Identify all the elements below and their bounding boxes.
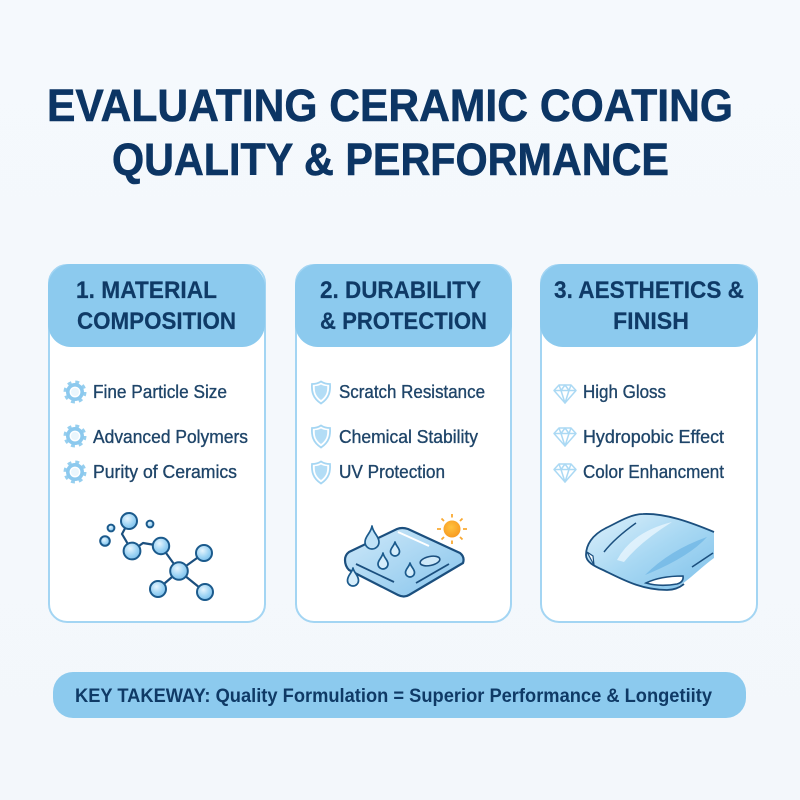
- item: scratch resistance: Scratch Resistance: [339, 381, 485, 402]
- title: [47, 80, 733, 185]
- panel heading: material composition: 1. MATERIAL: [76, 277, 217, 304]
- panel: material composition: [48, 264, 265, 622]
- panel heading: aesthetics and finish: FINISH: [613, 308, 689, 335]
- panel heading: durability and protection: & PROTECTION: [320, 308, 487, 335]
- panel heading: material composition: COMPOSITION: [77, 308, 236, 335]
- icon: glossy car hood: [586, 514, 714, 590]
- panel heading: durability and protection: [295, 264, 512, 347]
- panel: aesthetics and finish: [540, 264, 758, 622]
- item: chemical stability: Chemical Stability: [339, 426, 479, 447]
- item: color enhancement: Color Enhancment: [583, 461, 724, 482]
- item: purity of ceramics: Purity of Ceramics: [93, 461, 237, 482]
- title: EVALUATING CERAMIC COATING: [47, 80, 733, 131]
- icon: molecule: [100, 513, 213, 600]
- key takeaway banner: KEY TAKEWAY: Quality Formulation = Superior Performance & Longetiity: [75, 686, 712, 707]
- item: hydrophobic effect: Hydropobic Effect: [583, 426, 724, 447]
- icon: coated block with water drops and sun: [345, 514, 467, 596]
- item: uv protection: UV Protection: [339, 461, 445, 482]
- panel heading: aesthetics and finish: [540, 264, 758, 347]
- title: QUALITY & PERFORMANCE: [112, 134, 669, 185]
- icon: sun: [437, 514, 467, 544]
- panel heading: material composition: [48, 264, 265, 347]
- panel heading: aesthetics and finish: 3. AESTHETICS &: [554, 277, 744, 304]
- key takeaway banner: [53, 672, 746, 718]
- panel: durability and protection: [295, 264, 512, 622]
- item: fine particle size: Fine Particle Size: [93, 381, 227, 402]
- panel heading: durability and protection: 2. DURABILITY: [320, 277, 481, 304]
- item: advanced polymers: Advanced Polymers: [93, 426, 248, 447]
- item: high gloss: [554, 381, 666, 403]
- item: high gloss: High Gloss: [583, 381, 666, 402]
